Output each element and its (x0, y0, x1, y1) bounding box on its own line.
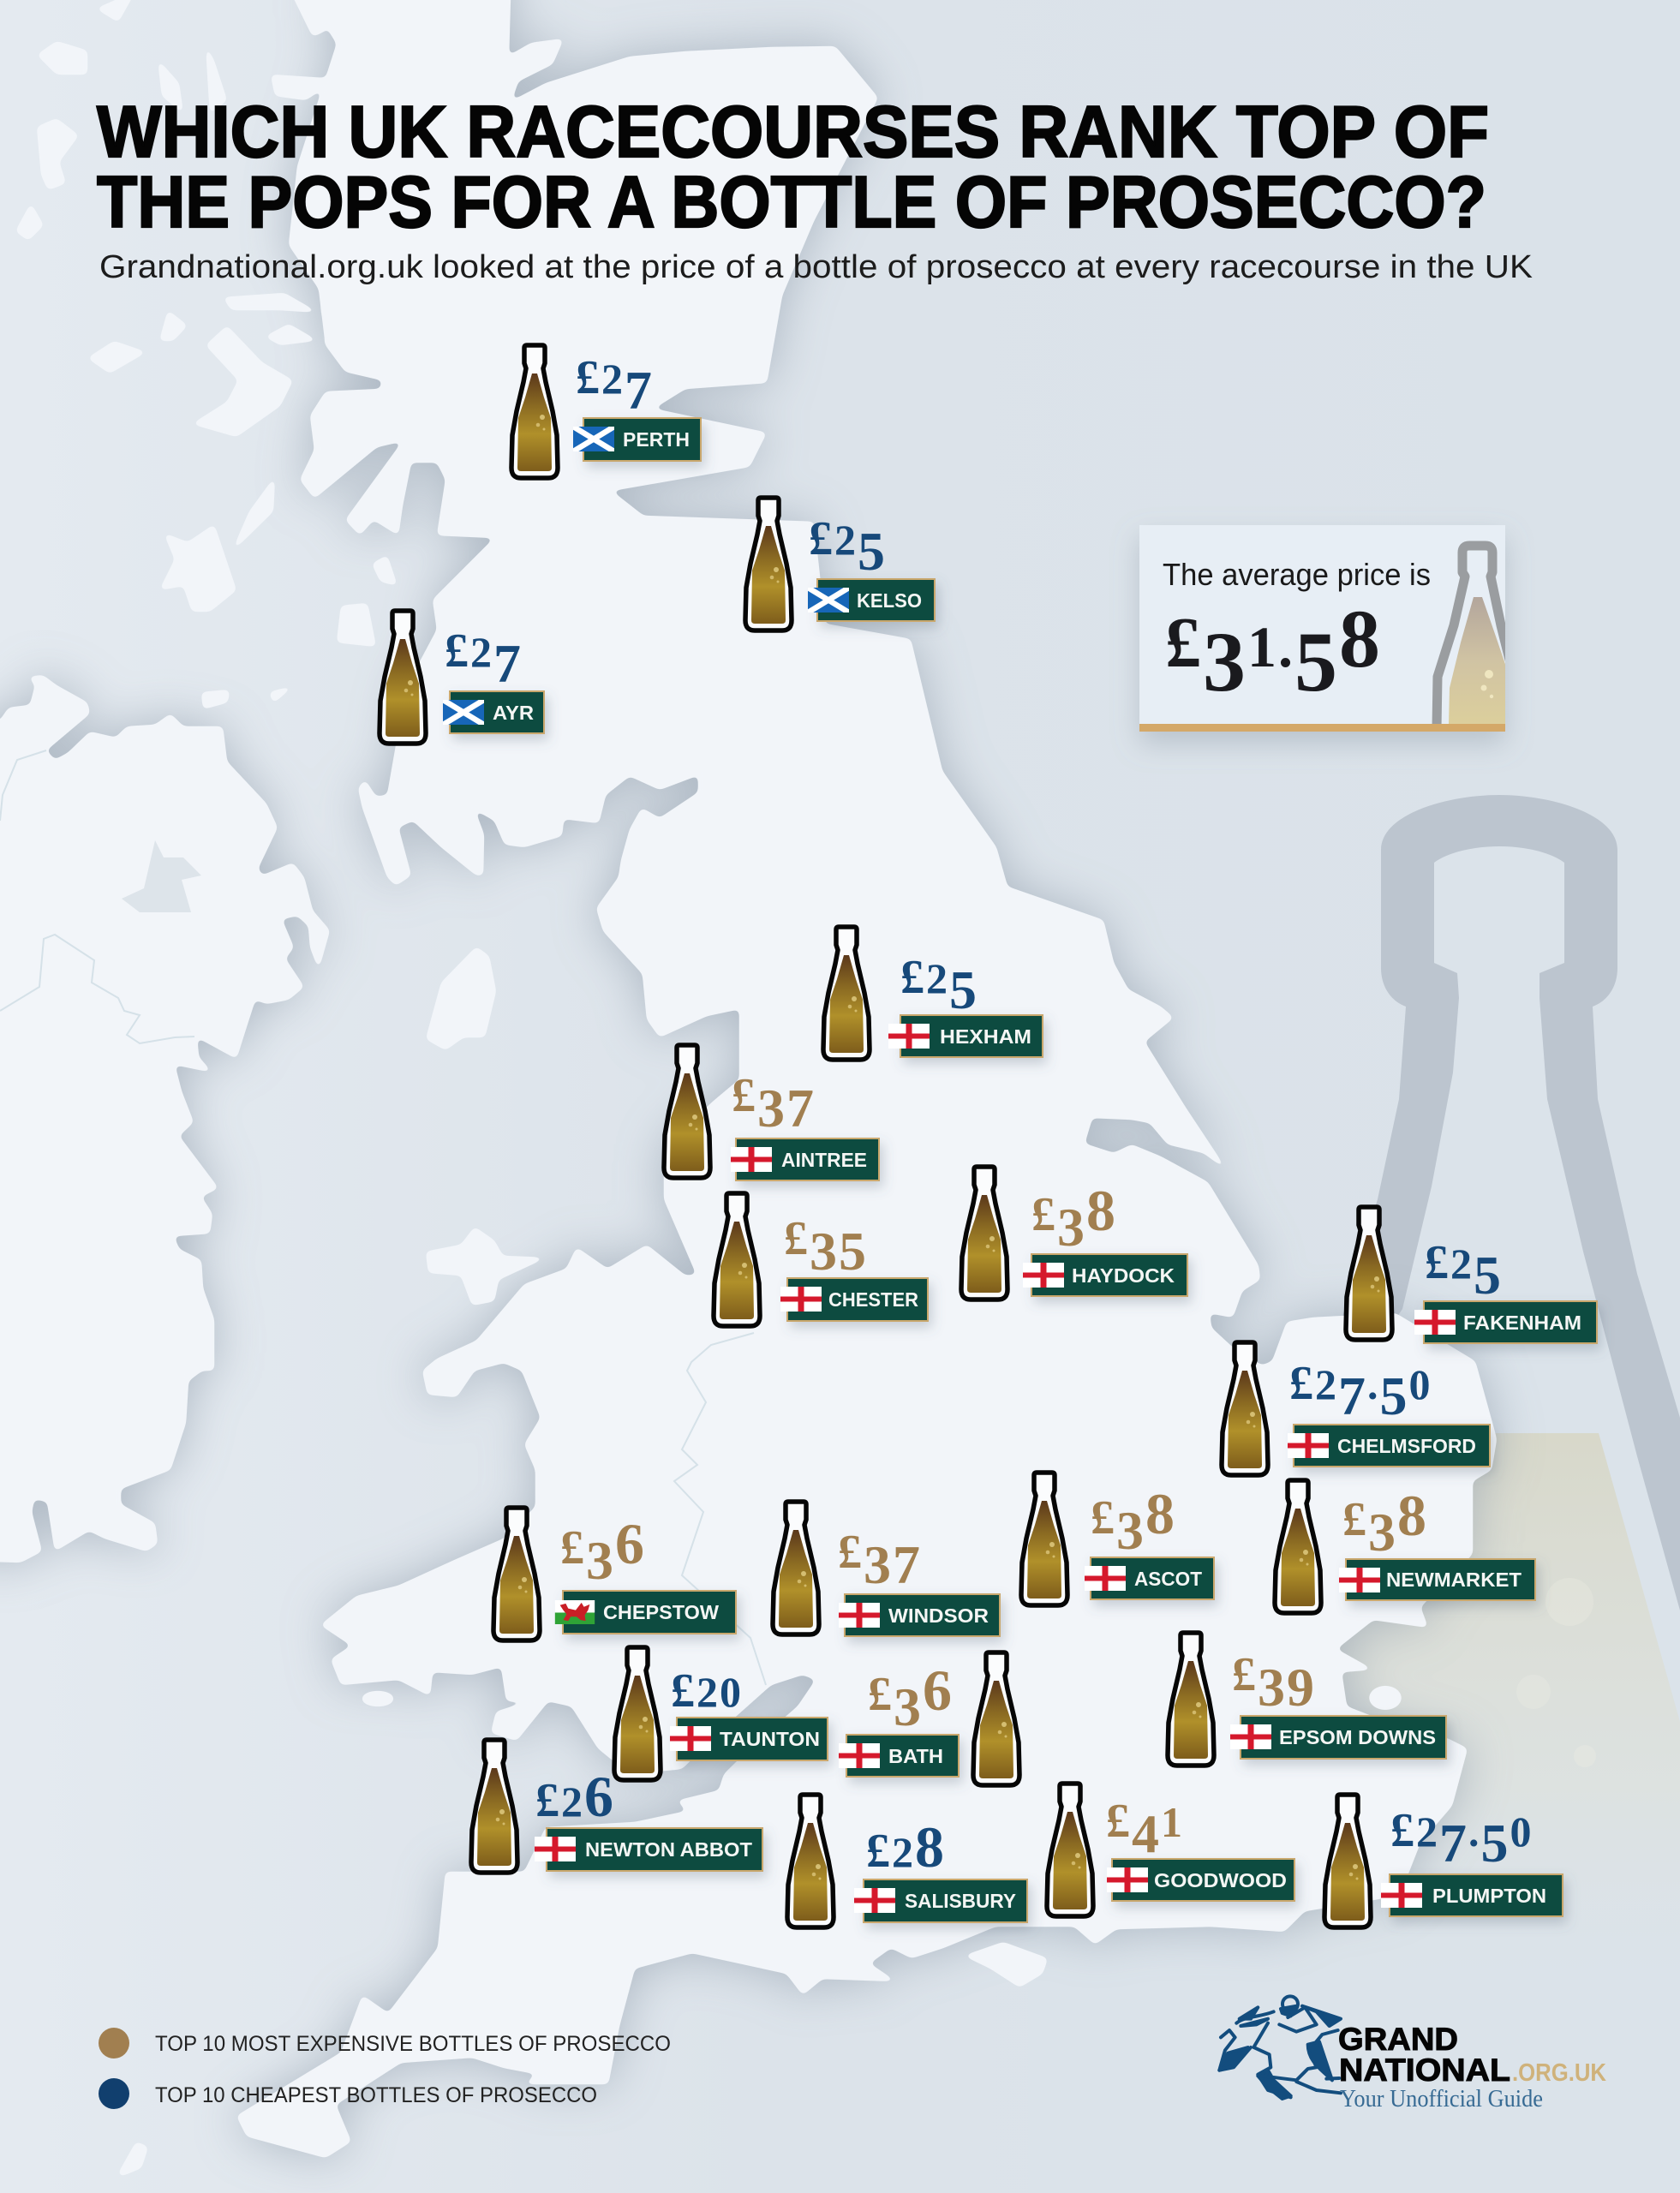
price: 6 (615, 1511, 646, 1576)
island: Isle of Wight (964, 1942, 1048, 1987)
name label (1381, 1874, 1563, 1916)
racecourse: Perth (511, 345, 701, 478)
name label (1085, 1557, 1214, 1599)
name label (839, 1735, 959, 1777)
small islands (118, 1686, 1402, 2177)
name label: KELSO (857, 589, 922, 612)
price: 7 (493, 633, 523, 694)
racecourse: Goodwood (1047, 1784, 1294, 1916)
name label: NEWMARKET (1386, 1569, 1522, 1591)
racecourse: Taunton (614, 1647, 828, 1780)
price: £2 (576, 351, 625, 404)
racecourse: Newmarket (1275, 1480, 1535, 1613)
callout: average price: 3 (1203, 614, 1247, 709)
name label: AINTREE (781, 1149, 867, 1171)
callout: average price: . (1278, 614, 1294, 679)
price: 0 (1408, 1360, 1432, 1408)
price: 8 (1086, 1178, 1117, 1243)
bottle (1222, 1342, 1268, 1475)
callout: average price: 8 (1339, 593, 1382, 684)
price: £ (838, 1526, 864, 1579)
racecourse: Chester (714, 1193, 928, 1326)
legend: most expensive: TOP 10 MOST EXPENSIVE BOTTLES OF PROSECCO (155, 2032, 671, 2056)
bottle (773, 1502, 819, 1634)
large background bottle (1028, 795, 1680, 2193)
price: 3 (1057, 1197, 1086, 1258)
islands (15, 0, 398, 709)
racecourse: Newton Abbot (471, 1740, 762, 1873)
name label: NEWTON ABBOT (585, 1838, 752, 1861)
name label (1288, 1425, 1490, 1467)
name label (839, 1594, 1000, 1636)
price: 5 (1379, 1365, 1408, 1426)
name label (1023, 1254, 1187, 1296)
callout: average price: 5 (1294, 614, 1339, 709)
name label: BATH (888, 1745, 943, 1767)
racecourse: Ayr (380, 611, 544, 744)
bottle (471, 1740, 517, 1873)
price: £28 (866, 1814, 946, 1879)
legend: cheapest: TOP 10 CHEAPEST BOTTLES OF PROSECCO (155, 2083, 597, 2107)
racecourse: Chepstow (493, 1508, 736, 1640)
bottle (1021, 1473, 1067, 1605)
price: 7 (1439, 1813, 1468, 1873)
map: borders (0, 750, 766, 1685)
name label: SALISBURY (905, 1890, 1016, 1912)
racecourse: Chelmsford (1222, 1342, 1490, 1475)
bottle (1275, 1480, 1321, 1613)
logo: Grand National: Your Unofficial Guide (1340, 2085, 1543, 2112)
price: £ (1342, 1493, 1368, 1546)
map: Lough Neagh (122, 840, 201, 912)
name label: WINDSOR (888, 1604, 989, 1627)
price: £2 (809, 512, 858, 565)
name label: HAYDOCK (1072, 1264, 1175, 1287)
island: Anglesey (426, 1227, 547, 1306)
price: £2 (1390, 1804, 1439, 1857)
name label (573, 418, 701, 461)
racecourse: Hexham (823, 927, 1043, 1060)
price: £ (560, 1521, 586, 1575)
bottle (511, 345, 558, 478)
price: 7 (625, 360, 654, 421)
name label: EPSOM DOWNS (1279, 1726, 1436, 1748)
racecourse: Bath (839, 1652, 1019, 1785)
price: 5 (1474, 1245, 1503, 1306)
name label: HEXHAM (940, 1025, 1031, 1048)
price: . (1367, 1360, 1379, 1408)
name label (443, 691, 544, 733)
price: 7 (786, 1078, 816, 1138)
price: 5 (858, 521, 887, 582)
callout: average price (1139, 525, 1515, 732)
price: 7 (1338, 1365, 1367, 1426)
price: 6 (923, 1658, 954, 1723)
racecourse: Kelso (745, 498, 935, 630)
callout: average price: 1 (1247, 614, 1278, 679)
price: 5 (839, 1221, 868, 1282)
price: £ (1106, 1795, 1132, 1848)
bottle (787, 1795, 834, 1927)
name label (854, 1879, 1027, 1922)
price: 4 (1132, 1803, 1161, 1864)
price: 0 (1510, 1808, 1534, 1855)
bottle (745, 498, 792, 630)
name label (888, 1015, 1043, 1057)
price: 3 (757, 1078, 786, 1138)
bottle (961, 1167, 1007, 1300)
bottle (714, 1193, 760, 1326)
bottle (1168, 1633, 1214, 1766)
racecourse: Haydock (961, 1167, 1187, 1300)
legend: most expensive (99, 2028, 671, 2059)
title: WHICH UK RACECOURSES RANK TOP OF (97, 92, 1489, 173)
name label: GOODWOOD (1154, 1869, 1287, 1891)
price: £20 (671, 1664, 743, 1718)
name label (808, 579, 935, 621)
name label: FAKENHAM (1463, 1312, 1581, 1334)
bottle (1346, 1207, 1392, 1340)
price: 3 (1368, 1502, 1397, 1563)
price: 3 (1116, 1500, 1145, 1561)
name label (535, 1828, 762, 1871)
price: £2 (1425, 1236, 1474, 1289)
name label (731, 1138, 879, 1180)
bottle (823, 927, 870, 1060)
price: £ (732, 1069, 757, 1122)
price: £2 (900, 951, 949, 1004)
price: £ (1091, 1491, 1116, 1545)
price: £2 (1289, 1357, 1338, 1410)
name label: CHEPSTOW (603, 1601, 719, 1623)
bottle (380, 611, 426, 744)
name label (1339, 1559, 1535, 1600)
bottle (1324, 1795, 1371, 1927)
subtitle: Grandnational.org.uk looked at the price of a bottle of prosecco at every racecourse in the UK (99, 249, 1533, 285)
price: 1 (1161, 1798, 1184, 1846)
price: £ (784, 1212, 810, 1265)
name label (780, 1278, 928, 1321)
price: 7 (893, 1534, 922, 1595)
name label (670, 1718, 828, 1760)
price: £ (1031, 1188, 1057, 1241)
price: 5 (1480, 1813, 1510, 1873)
price: 3 (586, 1530, 615, 1591)
callout: average price: The average price is (1163, 557, 1431, 592)
icon: horse and jockey (1219, 1996, 1341, 2099)
price: 5 (949, 959, 978, 1020)
landmass: Great Britain (236, 0, 1497, 2158)
bottle (493, 1508, 540, 1640)
bottle (614, 1647, 661, 1780)
name label (1230, 1716, 1446, 1759)
callout: average price: £ (1165, 603, 1203, 683)
name label: CHESTER (828, 1288, 918, 1311)
landmass: Ireland (0, 675, 330, 1563)
price: £ (868, 1668, 894, 1721)
island: Lough-surrounding Isle of Man (426, 947, 496, 1050)
price: £ (1232, 1648, 1258, 1701)
name label: TAUNTON (720, 1728, 820, 1750)
bottle (664, 1045, 710, 1178)
legend: cheapest (99, 2078, 597, 2109)
price: 3 (1258, 1657, 1287, 1718)
price: 3 (864, 1534, 893, 1595)
price: 3 (894, 1676, 923, 1737)
logo: Grand National: .ORG.UK (1512, 2059, 1606, 2087)
title: THE POPS FOR A BOTTLE OF PROSECCO? (97, 162, 1486, 243)
racecourse: Windsor (773, 1502, 1000, 1636)
price: . (1468, 1808, 1480, 1855)
racecourse: Fakenham (1346, 1207, 1597, 1343)
racecourse: Ascot (1021, 1473, 1214, 1605)
price: £26 (535, 1764, 615, 1829)
price: £2 (445, 624, 493, 678)
bottle (973, 1652, 1019, 1785)
name label: PLUMPTON (1432, 1885, 1546, 1907)
name label (1414, 1301, 1597, 1343)
racecourse: Epsom Downs (1168, 1633, 1446, 1766)
price: 8 (1397, 1483, 1428, 1548)
icon: faded bottle (1437, 546, 1515, 728)
logo: Grand National: NATIONAL (1339, 2053, 1510, 2088)
legend (99, 2028, 671, 2109)
logo: Grand National (1219, 1996, 1606, 2112)
bottle (1047, 1784, 1093, 1916)
racecourse: Plumpton (1324, 1795, 1563, 1927)
name label: CHELMSFORD (1337, 1435, 1476, 1457)
name label: ASCOT (1134, 1568, 1202, 1590)
name label (1107, 1859, 1294, 1901)
racecourse: Salisbury (787, 1795, 1027, 1927)
logo: Grand National: GRAND (1338, 2022, 1458, 2057)
racecourse: Aintree (664, 1045, 879, 1180)
price: 8 (1145, 1481, 1176, 1546)
name label: PERTH (623, 428, 690, 451)
name label: AYR (493, 702, 534, 724)
title (97, 92, 1489, 243)
price: 9 (1287, 1657, 1316, 1718)
price: 3 (810, 1221, 839, 1282)
name label (555, 1591, 736, 1634)
